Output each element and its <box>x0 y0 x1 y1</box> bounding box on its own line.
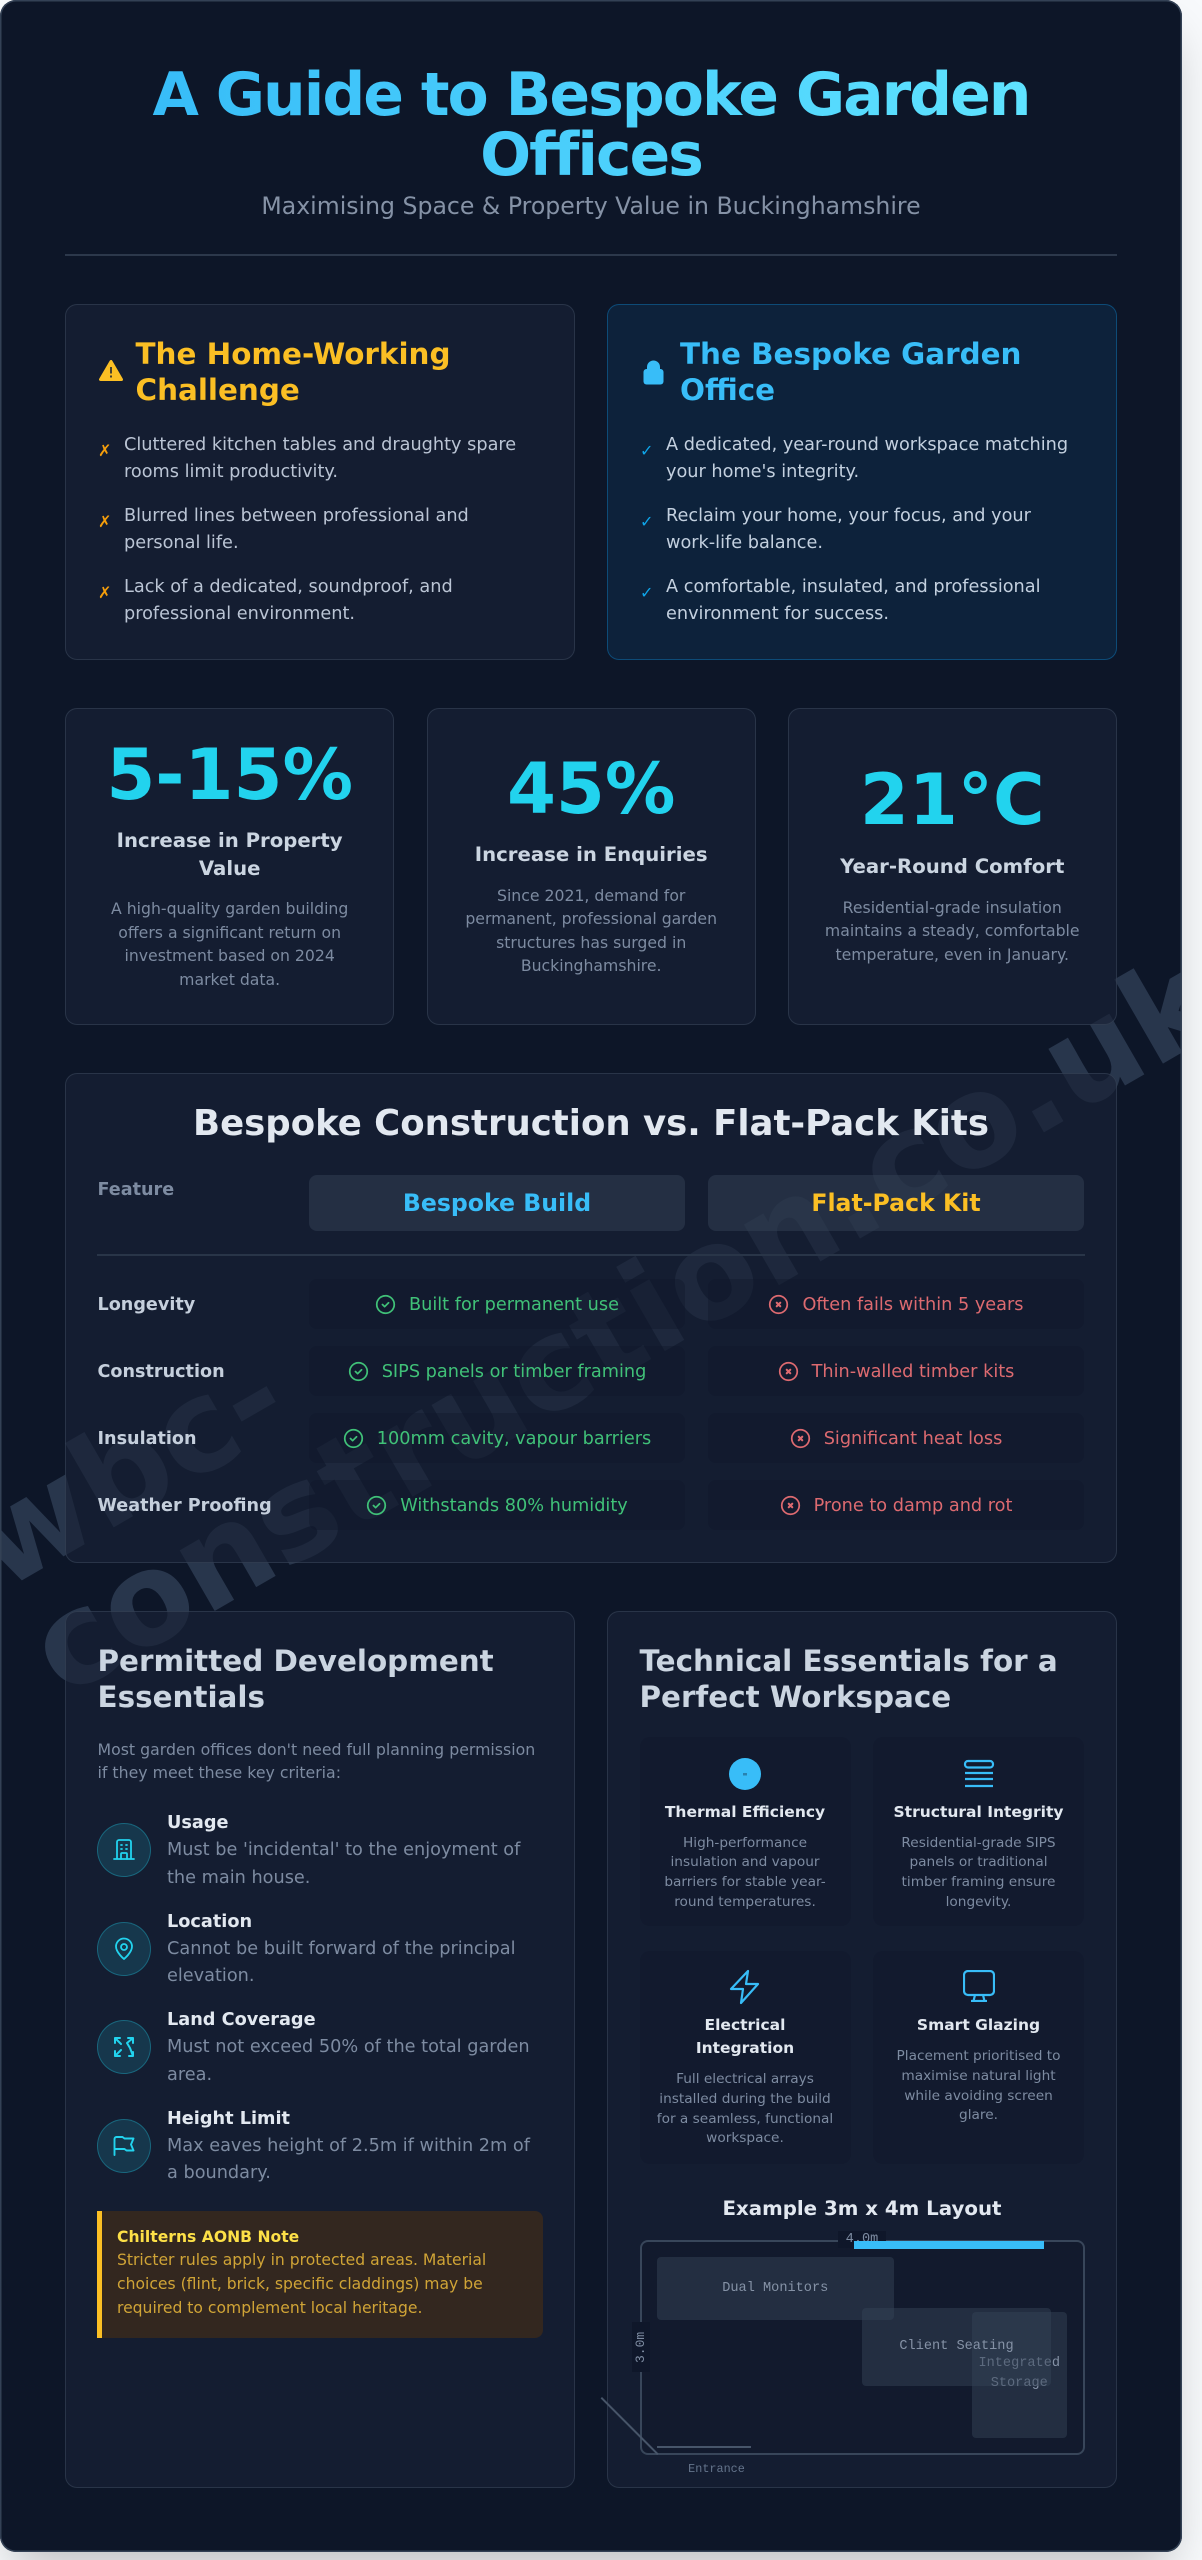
title <box>65 65 1117 185</box>
panel: the home-working challenge: ✗ <box>98 440 111 460</box>
stat label: Increase in Enquiries <box>475 843 708 866</box>
card: thermal efficiency: Thermal Efficiency <box>665 1802 825 1820</box>
row: longevity <box>98 1294 1024 1315</box>
card: structural integrity: timber framing ensure <box>902 1874 1055 1890</box>
list item <box>98 434 516 482</box>
row: construction: Thin-walled timber kits <box>812 1362 1014 1382</box>
stat description: Since 2021, demand for <box>497 886 685 904</box>
card: smart glazing: Smart Glazing <box>917 2016 1040 2034</box>
watermark <box>0 924 1182 1725</box>
stat description: investment based on 2024 <box>124 946 335 965</box>
panel: the bespoke garden office: ✓ <box>640 512 653 530</box>
list item: A dedicated, year-round workspace matching <box>666 434 1068 454</box>
icon: arrows <box>97 2020 151 2074</box>
stat number: 45% <box>507 748 675 830</box>
heading: The Bespoke Garden <box>680 337 1021 371</box>
icon: building <box>97 1823 151 1877</box>
list item: your home's integrity. <box>666 462 859 482</box>
icon: monitor <box>963 1970 995 2002</box>
dimension label: width: 4.0m <box>846 2232 878 2247</box>
row: insulation: 100mm cavity, vapour barriers <box>377 1428 651 1448</box>
callout: chilterns aonb note: Stricter rules apply in protected areas. Material <box>117 2251 486 2269</box>
stat description <box>465 886 717 975</box>
zone: integrated storage: Storage <box>991 2376 1048 2391</box>
card: electrical integration: workspace. <box>706 2130 784 2146</box>
criterion: usage: Must be 'incidental' to the enjoyment of <box>167 1840 520 1860</box>
criterion: land coverage <box>97 2010 530 2085</box>
heading: Essentials <box>98 1680 265 1714</box>
stat description: structures has surged in <box>496 933 686 952</box>
row: insulation: Insulation <box>98 1429 197 1449</box>
title: A Guide to Bespoke Garden <box>152 60 1030 130</box>
zone: dual monitors: Dual Monitors <box>722 2280 828 2296</box>
criterion: height limit: a boundary. <box>167 2163 271 2183</box>
card: electrical integration: for a seamless, functional <box>657 2111 833 2127</box>
stat label: Year-Round Comfort <box>840 855 1064 878</box>
dimension label: width <box>838 2231 886 2248</box>
list item: A comfortable, insulated, and professional <box>666 576 1041 596</box>
row: weather proofing <box>98 1496 1012 1526</box>
icon: warning <box>99 360 123 381</box>
panel: the bespoke garden office: ✓ <box>640 440 653 460</box>
column header: flat-pack kit <box>708 1175 1084 1231</box>
panel: the home-working challenge <box>65 304 575 660</box>
icon: pin <box>97 1922 151 1976</box>
zone: integrated storage <box>972 2312 1066 2438</box>
list item: rooms limit productivity. <box>124 462 338 482</box>
criterion: land coverage: area. <box>167 2065 212 2085</box>
list item: Reclaim your home, your focus, and your <box>666 506 1031 526</box>
card: electrical integration: Integration <box>696 2039 794 2057</box>
row: weather proofing: Weather Proofing <box>98 1496 272 1516</box>
stat card: enquiries <box>427 708 756 1025</box>
card: electrical integration: Full electrical arrays <box>676 2071 814 2087</box>
criterion: location <box>97 1912 516 1986</box>
stat description: permanent, professional garden <box>465 909 717 928</box>
criterion: height limit <box>97 2108 530 2183</box>
callout: chilterns aonb note: Chilterns AONB Note <box>117 2228 299 2246</box>
stat number: 21°C <box>860 758 1045 840</box>
zone: dual monitors <box>657 2256 894 2320</box>
criterion: usage <box>97 1813 521 1888</box>
zone: client seating <box>862 2308 1051 2386</box>
column header: bespoke build <box>309 1175 685 1231</box>
list item <box>640 576 1041 624</box>
subtitle: Maximising Space & Property Value in Buckinghamshire <box>261 192 921 220</box>
heading: Permitted Development <box>98 1644 494 1678</box>
intro text <box>98 1740 535 1782</box>
row: construction <box>98 1362 1014 1382</box>
card: smart glazing: Placement prioritised to <box>897 2048 1060 2064</box>
row: longevity: Often fails within 5 years <box>802 1294 1024 1314</box>
heading <box>136 337 451 407</box>
card: electrical integration: installed during the build <box>659 2091 831 2107</box>
icon: lock <box>644 360 664 384</box>
heading: Perfect Workspace <box>640 1680 951 1714</box>
card: thermal efficiency: barriers for stable year- <box>664 1874 826 1890</box>
column header: flat-pack kit: Flat-Pack Kit <box>811 1189 981 1217</box>
feature column label: Feature <box>98 1180 174 1200</box>
dimension label: depth <box>632 2322 650 2372</box>
list item: personal life. <box>124 533 239 553</box>
criterion: location: Cannot be built forward of the principal <box>167 1939 516 1959</box>
card: structural integrity: longevity. <box>946 1894 1011 1910</box>
stat description: offers a significant return on <box>118 923 341 942</box>
heading <box>680 337 1021 407</box>
stat description: temperature, even in January. <box>835 945 1069 964</box>
list item: environment for success. <box>666 604 889 624</box>
stat description: maintains a steady, comfortable <box>825 921 1080 940</box>
card: thermal efficiency: insulation and vapour <box>670 1854 820 1870</box>
panel: comparison table <box>65 1073 1117 1563</box>
list item: work-life balance. <box>666 533 823 553</box>
icon: layers <box>964 1760 994 1788</box>
panel: technical essentials <box>607 1611 1117 2488</box>
column header: bespoke build: Bespoke Build <box>403 1189 591 1217</box>
stat label: Increase in Property <box>117 829 343 852</box>
zone: integrated storage: Integrated <box>978 2356 1060 2371</box>
card: structural integrity <box>873 1737 1084 1926</box>
card: structural integrity: panels or traditional <box>909 1854 1048 1870</box>
list item: professional environment. <box>124 604 355 624</box>
card: smart glazing <box>873 1951 1084 2164</box>
card: thermal efficiency: High-performance <box>683 1834 807 1850</box>
row: longevity: Longevity <box>98 1295 195 1315</box>
stat description <box>825 898 1080 964</box>
criterion: land coverage: Must not exceed 50% of the total garden <box>167 2037 530 2057</box>
stat description: Residential-grade insulation <box>843 898 1062 916</box>
door swing <box>600 2397 658 2455</box>
panel: the bespoke garden office: ✓ <box>640 582 653 602</box>
callout: chilterns aonb note <box>97 2211 543 2338</box>
list item: Lack of a dedicated, soundproof, and <box>124 576 453 596</box>
heading: The Home-Working <box>136 337 451 371</box>
list item: Cluttered kitchen tables and draughty spare <box>124 434 516 454</box>
row: weather proofing: Prone to damp and rot <box>814 1496 1012 1516</box>
heading: Challenge <box>136 373 300 407</box>
row: construction: SIPS panels or timber framing <box>382 1362 646 1382</box>
layout heading: Example 3m x 4m Layout <box>722 2197 1002 2220</box>
criterion: height limit: Height Limit <box>167 2108 290 2128</box>
icon: thermal <box>729 1758 761 1790</box>
card: structural integrity: Structural Integrity <box>894 1802 1064 1820</box>
accent bar <box>854 2241 1044 2249</box>
stat description: market data. <box>179 970 280 989</box>
card: smart glazing: maximise natural light <box>901 2068 1056 2084</box>
card: electrical integration: Electrical <box>705 2016 785 2034</box>
title: Offices <box>480 120 702 190</box>
door threshold <box>657 2446 751 2448</box>
criterion: usage: the main house. <box>167 1868 310 1888</box>
row: weather proofing: Withstands 80% humidity <box>400 1496 628 1516</box>
panel: the home-working challenge: ✗ <box>98 512 111 530</box>
zone: client seating: Client Seating <box>899 2339 1014 2354</box>
stat description: Buckinghamshire. <box>521 956 662 975</box>
criterion: usage: Usage <box>167 1813 228 1833</box>
panel: the bespoke garden office <box>607 304 1117 660</box>
heading: Technical Essentials for a <box>640 1644 1058 1678</box>
heading <box>640 1644 1058 1714</box>
intro text: if they meet these key criteria: <box>98 1763 341 1782</box>
criterion: location: Location <box>167 1912 252 1932</box>
card: smart glazing: glare. <box>959 2107 998 2123</box>
list item <box>98 576 453 624</box>
callout: chilterns aonb note: choices (flint, brick, specific claddings) may be <box>117 2275 483 2293</box>
icon: bolt <box>730 1970 760 2004</box>
row: construction: Construction <box>98 1362 225 1382</box>
card: thermal efficiency <box>640 1737 850 1926</box>
stat description <box>111 899 348 989</box>
table title: Bespoke Construction vs. Flat-Pack Kits <box>193 1103 989 1144</box>
criterion: land coverage: Land Coverage <box>167 2010 316 2030</box>
callout: chilterns aonb note: required to complement local heritage. <box>117 2299 422 2317</box>
panel: permitted development <box>65 1611 575 2488</box>
card: thermal efficiency: round temperatures. <box>674 1894 816 1910</box>
panel: the home-working challenge: ✗ <box>98 582 111 602</box>
list item: Blurred lines between professional and <box>124 506 469 526</box>
criterion: location: elevation. <box>167 1966 254 1986</box>
stat card: property value <box>65 708 394 1025</box>
card: structural integrity: Residential-grade SIPS <box>901 1834 1056 1850</box>
icon: flag <box>97 2118 151 2172</box>
stat label: Value <box>199 857 260 880</box>
floor plan <box>640 2240 1084 2454</box>
card: smart glazing: while avoiding screen <box>904 2088 1053 2104</box>
row: longevity: Built for permanent use <box>409 1294 619 1314</box>
stat label <box>117 829 343 880</box>
intro text: Most garden offices don't need full planning permission <box>98 1740 535 1759</box>
stat number: 5-15% <box>106 734 353 816</box>
row: insulation <box>98 1428 1002 1449</box>
list item <box>640 434 1068 482</box>
entrance label: Entrance <box>688 2462 745 2476</box>
dimension label: depth: 3.0m <box>632 2331 648 2362</box>
list item <box>640 506 1031 553</box>
row: insulation: Significant heat loss <box>824 1428 1002 1448</box>
stat description: A high-quality garden building <box>111 899 348 918</box>
card: electrical integration <box>640 1951 850 2164</box>
stat card: comfort <box>788 708 1117 1025</box>
list item <box>98 506 469 553</box>
criterion: height limit: Max eaves height of 2.5m if within 2m of <box>167 2136 530 2156</box>
heading <box>98 1644 494 1714</box>
heading: Office <box>680 373 775 407</box>
